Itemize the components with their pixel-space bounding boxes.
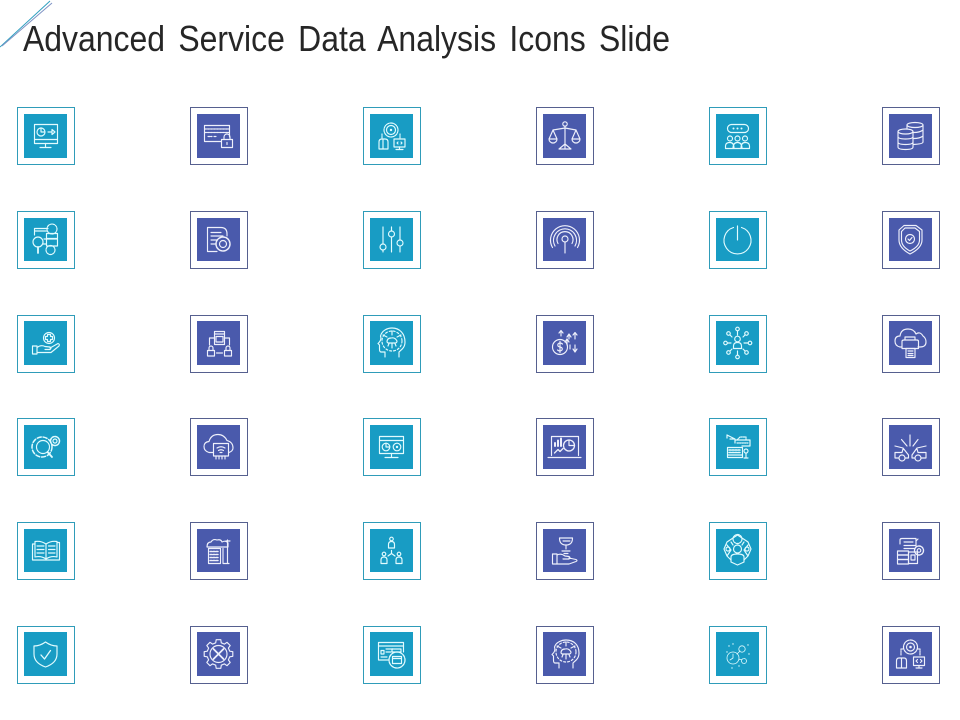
icon: monitor with pie chart	[34, 124, 58, 148]
icon: transport	[727, 435, 750, 458]
icon: gear, people and code monitor	[379, 123, 405, 150]
icon: AI head	[378, 328, 405, 357]
tile: leadership network	[710, 522, 766, 580]
tile: database stacks	[882, 108, 940, 164]
icon: building with cloud and crane	[207, 540, 230, 564]
tile: cloud printer	[882, 316, 940, 372]
icon: car crash	[895, 435, 926, 461]
icon: building with linked locks	[208, 332, 232, 356]
tile: linked faces	[710, 626, 766, 684]
tile: balance scale	[536, 108, 594, 164]
tile: team discussion	[710, 108, 766, 164]
icon: cloud printer	[895, 329, 926, 358]
icon: balance scale	[549, 122, 580, 149]
tile: document with gear	[190, 212, 248, 268]
icon: cloud with wifi chip	[204, 434, 233, 459]
title: Advanced Service Data Analysis Icons Slide	[23, 18, 670, 59]
icon: document with gear	[208, 228, 230, 252]
tile: shield with check	[18, 626, 74, 684]
icon: laptop with charts	[548, 436, 581, 458]
icon: sliders	[380, 227, 403, 252]
tile: security shield	[882, 212, 940, 268]
tile: broadcast signal	[536, 212, 594, 268]
icon: team discussion	[726, 124, 750, 148]
tile: building with cloud and crane	[190, 522, 248, 580]
tile: cloud with wifi chip	[190, 418, 248, 476]
icon: open book	[32, 541, 60, 560]
icon: gear, people and code monitor	[896, 640, 924, 668]
tile: AI head	[536, 626, 594, 684]
tile: monitor with pie chart	[18, 108, 74, 164]
icon: search data and gears	[33, 224, 58, 254]
icon: people hierarchy	[381, 537, 402, 564]
icon: browser with badge	[378, 642, 405, 668]
tile: browser with badge	[364, 626, 420, 684]
tile: hand holding plus	[18, 316, 74, 372]
tile: people hierarchy	[364, 522, 420, 580]
tile: power button	[710, 212, 766, 268]
tile: documents, stack and gear	[882, 522, 940, 580]
tile: monitor with dials	[364, 418, 420, 476]
icon: credit card and lock	[204, 126, 232, 148]
tile: sliders	[364, 212, 420, 268]
tile: laptop with charts	[536, 418, 594, 476]
icon: hand with goblet	[552, 538, 577, 564]
icon: hand holding plus	[32, 332, 59, 354]
tile: search data and gears	[18, 212, 74, 268]
icon: database stacks	[898, 122, 923, 150]
tile: hand with goblet	[536, 522, 594, 580]
icon: AI head	[552, 640, 579, 668]
icon: documents, stack and gear	[898, 538, 924, 564]
icon: dollar coin with arrows	[552, 330, 577, 354]
tile: building with linked locks	[190, 316, 248, 372]
tile: person network	[710, 316, 766, 372]
icon: leadership network	[724, 534, 751, 565]
tile: car crash	[882, 418, 940, 476]
icon: linked faces	[726, 643, 750, 669]
tile: credit card and lock	[190, 108, 248, 164]
icon: power button	[724, 226, 751, 254]
icon: monitor with dials	[380, 436, 404, 458]
tile: transport	[710, 418, 766, 476]
tile: AI head	[364, 316, 420, 372]
icon: gears and magnifier	[32, 436, 60, 457]
icon: gear with tools	[204, 640, 233, 668]
icon: security shield	[899, 226, 922, 254]
tile: gear, people and code monitor	[364, 108, 420, 164]
icon: shield with check	[34, 642, 57, 667]
decorative corner lines	[0, 1, 52, 47]
icon: person network	[724, 327, 752, 359]
tile: gear, people and code monitor	[882, 626, 940, 684]
tile: gears and magnifier	[18, 418, 74, 476]
tile: gear with tools	[190, 626, 248, 684]
tile: dollar coin with arrows	[536, 316, 594, 372]
tile: open book	[18, 522, 74, 580]
icon: broadcast signal	[550, 226, 580, 253]
